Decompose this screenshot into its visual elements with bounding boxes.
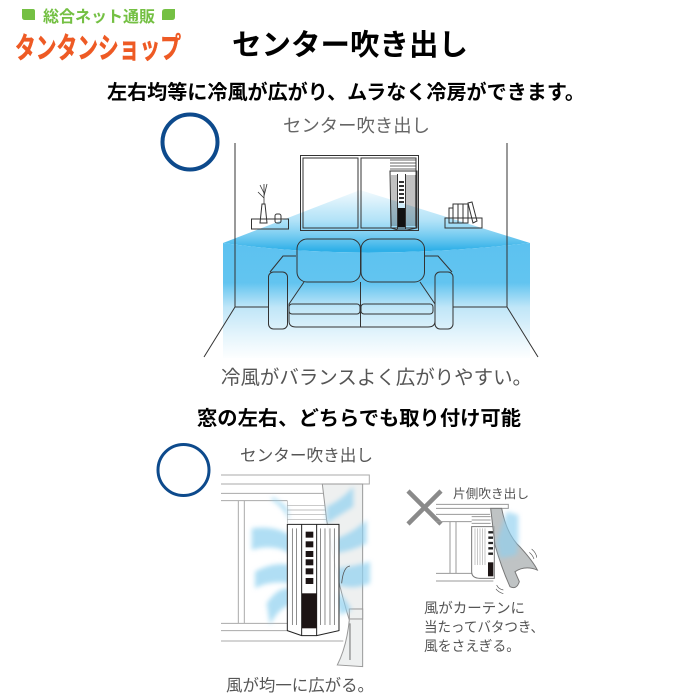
- subtitle: install either side: 窓の左右、どちらでも取り付け可能: [197, 407, 521, 430]
- window frame: [221, 475, 369, 641]
- window frame: [436, 504, 508, 581]
- logo tagline: 総合ネット通販: [43, 8, 155, 26]
- icon: circle mark top: [162, 114, 218, 170]
- motion lines: [496, 549, 537, 594]
- label: center outlet lower: センター吹き出し: [240, 446, 373, 465]
- caption: side drawback: 風をさえぎる。: [424, 638, 520, 655]
- blue air fan: [223, 190, 530, 252]
- icon: circle mark bottom: [158, 444, 209, 496]
- illustration: room with center airflow: [204, 116, 538, 358]
- room walls: [204, 143, 538, 357]
- air streams: [252, 487, 370, 625]
- side cooler unit: [472, 527, 494, 578]
- curtain fold: [342, 566, 350, 660]
- caption: even airflow: 風が均一に広がる。: [226, 677, 374, 695]
- air blue: [497, 512, 518, 558]
- illustration: center unit in window: [221, 475, 370, 667]
- label: one side outlet: 片側吹き出し: [453, 487, 529, 501]
- cooler unit: [287, 524, 339, 636]
- icon: right leaf: [162, 9, 175, 20]
- subtitle: cooling spread: 左右均等に冷風が広がり、ムラなく冷房ができます。: [107, 80, 585, 104]
- shelf left with vase: [252, 184, 288, 229]
- blown curtain: [491, 508, 537, 588]
- logo name: タンタンショップ: [15, 32, 181, 65]
- caption: side drawback: [424, 600, 544, 655]
- label: center outlet: センター吹き出し: [283, 116, 430, 136]
- curtain: [322, 484, 363, 667]
- shelf right with books: [445, 202, 482, 228]
- title: センター吹き出し: [232, 29, 468, 62]
- logo: shop: [15, 8, 181, 65]
- window: [300, 156, 418, 230]
- icon: left leaf: [22, 9, 35, 20]
- caption: balanced airflow: 冷風がバランスよく広がりやすい。: [221, 367, 532, 389]
- sofa: [268, 239, 453, 329]
- caption: side drawback: 当たってバタつき、: [424, 619, 544, 636]
- illustration: side unit with curtain: [436, 504, 537, 594]
- icon: cross mark: [408, 491, 441, 524]
- blue air floor: [223, 243, 530, 358]
- caption: side drawback: 風がカーテンに: [424, 600, 525, 617]
